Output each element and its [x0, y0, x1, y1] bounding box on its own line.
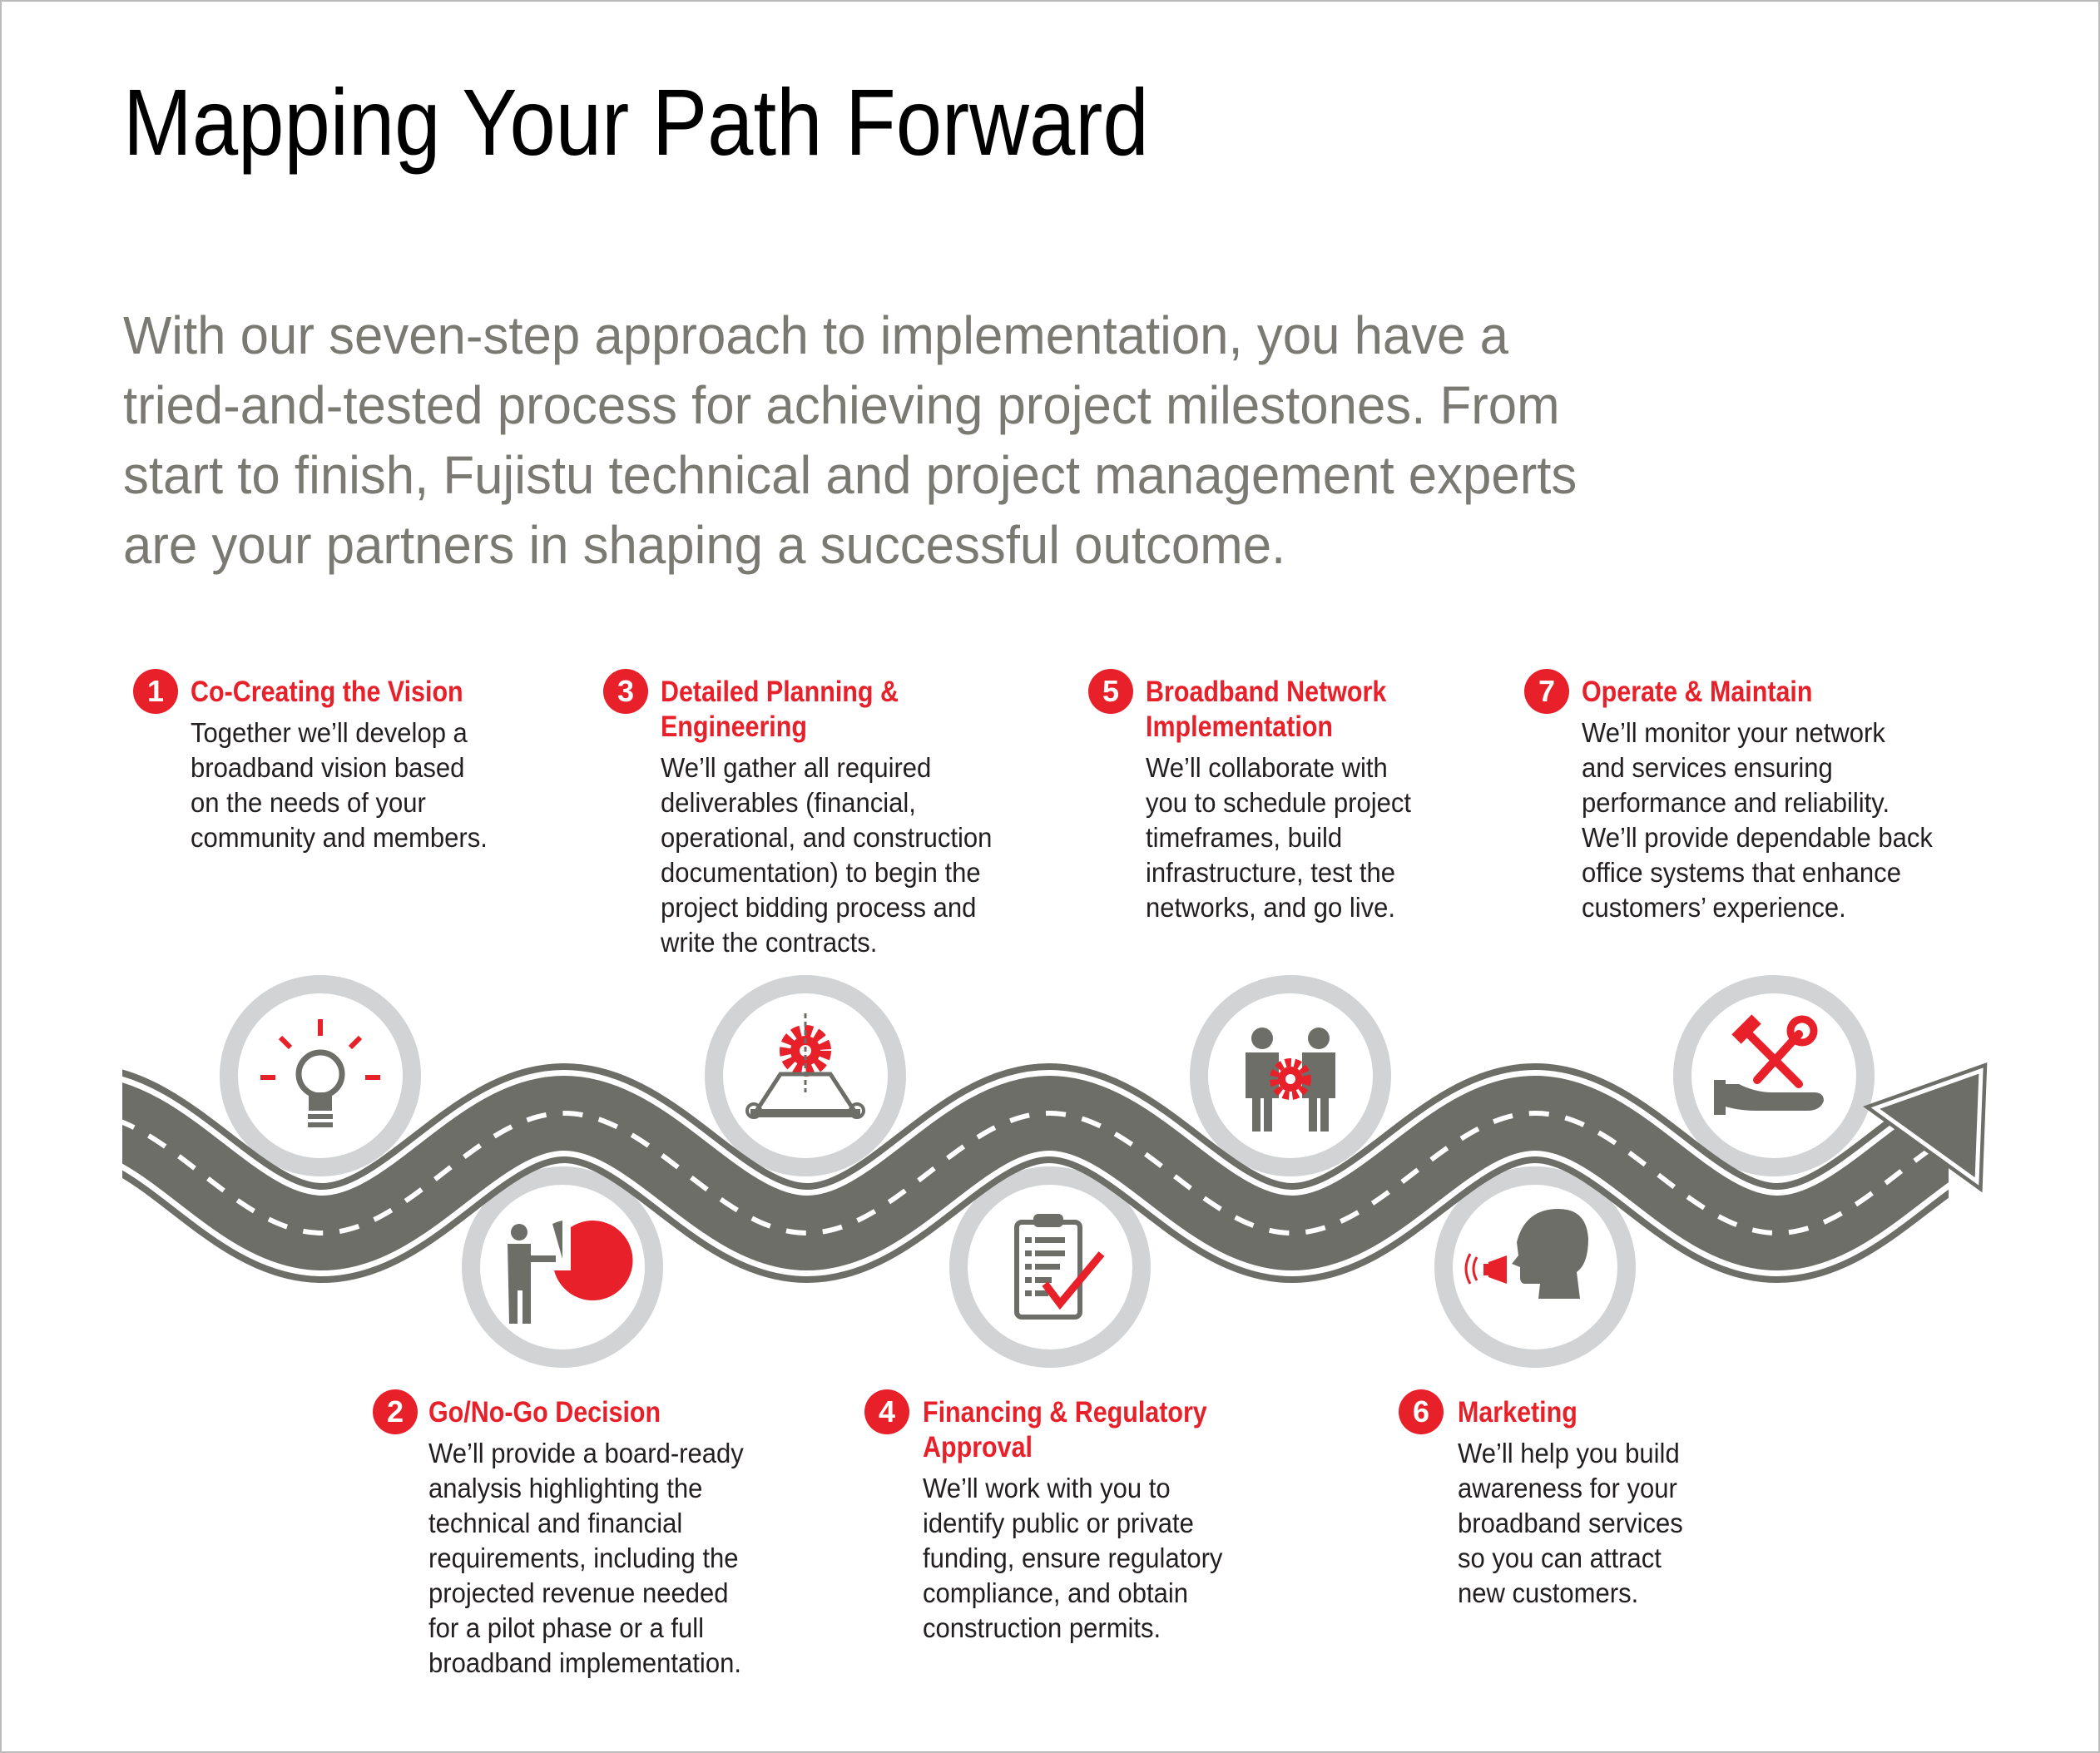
- road graphic: [122, 975, 1987, 1368]
- step 7: operate and maintain: and services ensuring: [1582, 752, 1833, 783]
- step 6: marketing: Marketing: [1458, 1396, 1577, 1429]
- step 3: detailed planning: Detailed Planning &: [661, 676, 899, 708]
- step 5: network implementation: Implementation: [1146, 711, 1333, 743]
- number badge 6: [1399, 1389, 1444, 1434]
- intro paragraph: start to finish, Fujistu technical and project management experts: [123, 445, 1577, 505]
- icon: clipboard with check: [1017, 1214, 1102, 1317]
- step 6: marketing: awareness for your: [1458, 1473, 1677, 1503]
- step 2: go/no-go: broadband implementation.: [428, 1647, 741, 1678]
- icon rings: [229, 984, 1865, 1359]
- title: Mapping Your Path Forward: [123, 70, 1149, 175]
- step 2: go/no-go: We’ll provide a board-ready: [428, 1438, 744, 1468]
- step 2: go/no-go: requirements, including the: [428, 1543, 738, 1573]
- step 4: financing: Approval: [923, 1431, 1033, 1463]
- number badge 7: 7: [1538, 674, 1555, 708]
- step 3: detailed planning: deliverables (financial,: [661, 787, 916, 818]
- step 6: marketing: new customers.: [1458, 1577, 1638, 1608]
- step 4: financing: [864, 1389, 1223, 1643]
- step 7: operate and maintain: We’ll provide dependable back: [1582, 822, 1933, 853]
- step 3: detailed planning: project bidding process and: [661, 892, 976, 923]
- number badge 7: [1524, 669, 1569, 714]
- step 7: operate and maintain: customers’ experience.: [1582, 892, 1846, 923]
- number badge 1: [133, 669, 178, 714]
- step 5: network implementation: infrastructure, test the: [1146, 857, 1395, 888]
- number badge 2: [373, 1389, 418, 1434]
- road: [80, 1113, 2020, 1233]
- step 2: go/no-go: [373, 1389, 744, 1678]
- number badge 1: 1: [147, 674, 164, 708]
- number badge 4: [864, 1389, 909, 1434]
- step 5: network implementation: We’ll collaborate with: [1146, 752, 1388, 783]
- step 1: co-creating the vision: broadband vision based: [191, 752, 464, 783]
- step 3: detailed planning: write the contracts.: [661, 927, 877, 958]
- icon: two people with gear: [1246, 1028, 1335, 1132]
- step 5: network implementation: Broadband Network: [1146, 676, 1386, 708]
- step 7: operate and maintain: [1524, 669, 1933, 923]
- step 3: detailed planning: We’ll gather all required: [661, 752, 931, 783]
- icon: planning gear and scroll: [747, 1013, 864, 1117]
- step 5: network implementation: networks, and go live.: [1146, 892, 1395, 923]
- step 4: financing: We’ll work with you to: [923, 1473, 1171, 1503]
- number badge 6: 6: [1413, 1394, 1429, 1429]
- step 6: marketing: [1399, 1389, 1683, 1608]
- step 3: detailed planning: [603, 669, 992, 958]
- number badge 3: 3: [617, 674, 634, 708]
- step 6: marketing: We’ll help you build: [1458, 1438, 1680, 1468]
- icon: presenter with pie chart: [508, 1221, 632, 1324]
- step 1: co-creating the vision: Co-Creating the Vision: [191, 676, 463, 708]
- step 7: operate and maintain: performance and reliability.: [1582, 787, 1890, 818]
- icon: hand with hammer and wrench: [1714, 1014, 1824, 1115]
- step 1: co-creating the vision: on the needs of your: [191, 787, 426, 818]
- step 4: financing: construction permits.: [923, 1612, 1161, 1643]
- step 4: financing: compliance, and obtain: [923, 1577, 1188, 1608]
- arrow head: [1875, 1071, 1981, 1181]
- number badge 4: 4: [879, 1394, 895, 1429]
- step 3: detailed planning: documentation) to begin the: [661, 857, 981, 888]
- intro paragraph: tried-and-tested process for achieving project milestones. From: [123, 375, 1560, 435]
- number badge 5: [1088, 669, 1133, 714]
- icon: light bulb: [260, 1019, 380, 1127]
- step 5: network implementation: you to schedule project: [1146, 787, 1411, 818]
- step 4: financing: Financing & Regulatory: [923, 1396, 1207, 1429]
- step 1: co-creating the vision: Together we’ll develop a: [191, 717, 468, 748]
- number badge 2: 2: [387, 1394, 404, 1429]
- step 4: financing: funding, ensure regulatory: [923, 1543, 1222, 1573]
- number badge 5: 5: [1102, 674, 1119, 708]
- step 4: financing: identify public or private: [923, 1508, 1194, 1538]
- intro paragraph: are your partners in shaping a successful outcome.: [123, 515, 1285, 575]
- step 2: go/no-go: for a pilot phase or a full: [428, 1612, 704, 1643]
- number badge 3: [603, 669, 648, 714]
- step 2: go/no-go: technical and financial: [428, 1508, 682, 1538]
- step 6: marketing: broadband services: [1458, 1508, 1683, 1538]
- intro paragraph: [123, 305, 1577, 575]
- step 3: detailed planning: Engineering: [661, 711, 807, 743]
- step 1: co-creating the vision: community and members.: [191, 822, 488, 853]
- icon: head with megaphone: [1466, 1209, 1588, 1299]
- step 5: network implementation: [1088, 669, 1411, 923]
- step 2: go/no-go: projected revenue needed: [428, 1577, 728, 1608]
- step 2: go/no-go: analysis highlighting the: [428, 1473, 702, 1503]
- step 7: operate and maintain: Operate & Maintain: [1582, 676, 1812, 708]
- step 1: co-creating the vision: [133, 669, 488, 853]
- step 2: go/no-go: Go/No-Go Decision: [428, 1396, 661, 1429]
- step 7: operate and maintain: We’ll monitor your network: [1582, 717, 1885, 748]
- step 6: marketing: so you can attract: [1458, 1543, 1662, 1573]
- step 7: operate and maintain: office systems that enhance: [1582, 857, 1901, 888]
- intro paragraph: With our seven-step approach to implementation, you have a: [123, 305, 1508, 365]
- step 5: network implementation: timeframes, build: [1146, 822, 1342, 853]
- step 3: detailed planning: operational, and construction: [661, 822, 992, 853]
